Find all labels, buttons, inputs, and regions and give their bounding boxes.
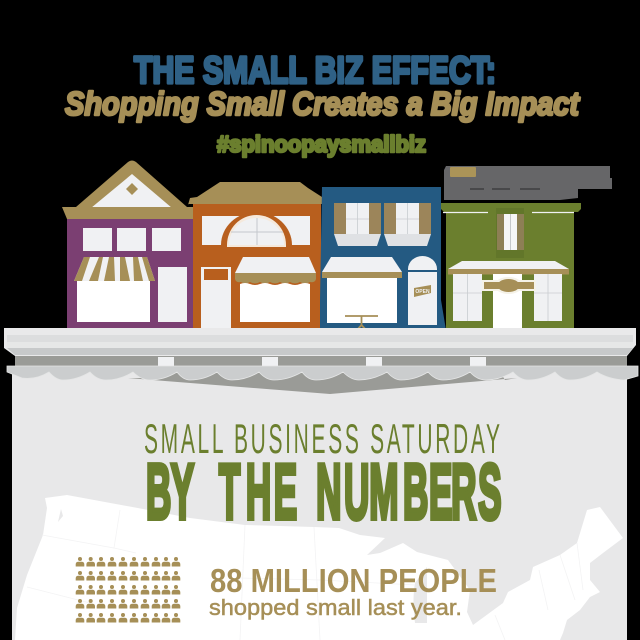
awning — [322, 257, 402, 278]
map of United States — [15, 495, 623, 640]
cafe table — [345, 316, 378, 330]
heading: small business saturday: SMALL BUSINESS SATURDAY — [144, 416, 500, 463]
subtitle: Shopping Small Creates a Big Impact — [65, 85, 581, 122]
icon grid: people — [76, 557, 180, 622]
upper window — [496, 208, 524, 258]
arched door with open sign — [408, 256, 437, 325]
building: blue shop — [320, 187, 446, 330]
panel: grey lower body — [12, 372, 627, 640]
awning shadow wedge — [128, 372, 517, 394]
scalloped awning band — [7, 366, 638, 380]
title: THE SMALL BIZ EFFECT: — [134, 50, 496, 92]
door — [201, 267, 231, 332]
awning — [448, 261, 569, 274]
grey strip — [15, 356, 627, 367]
gable roof — [76, 160, 187, 207]
building: orange shop — [188, 182, 322, 332]
heading: by the numbers: BY THE NUMBERS — [146, 448, 502, 535]
striped awning — [74, 257, 155, 281]
storefront windows — [453, 274, 562, 321]
upper windows — [83, 228, 181, 251]
right shuttered window — [384, 203, 431, 246]
building: purple shop — [62, 160, 193, 330]
scalloped awning — [235, 257, 316, 284]
panel: pavement ledge — [4, 328, 636, 367]
roof — [188, 182, 322, 205]
stat: 88 million people: 88 MILLION PEOPLE — [210, 562, 497, 599]
arched window — [221, 212, 292, 247]
support blocks — [158, 357, 486, 367]
left shuttered window — [334, 203, 381, 246]
stat caption: shopped small last year. — [209, 595, 462, 620]
hashtag: #spinoopaysmallbiz — [217, 131, 426, 157]
building: green shop — [441, 203, 581, 330]
blurred note above green shop — [444, 166, 612, 200]
arched door with open sign: OPEN — [415, 289, 430, 295]
hanging sign — [482, 277, 536, 294]
